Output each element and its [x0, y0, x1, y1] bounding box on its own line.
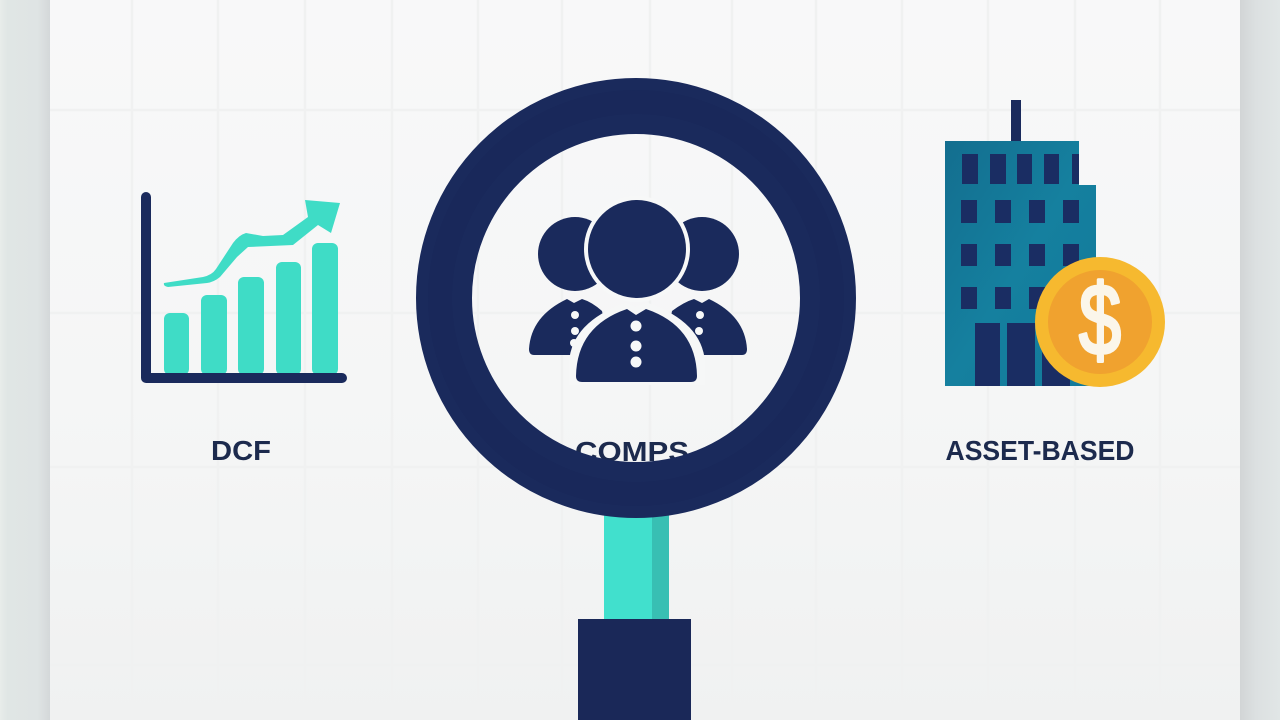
- chart axes: [146, 197, 342, 378]
- center peer: [569, 196, 705, 385]
- DCF growth chart icon: [146, 197, 342, 378]
- magnifying glass handle: [578, 510, 691, 720]
- antenna: [1011, 100, 1021, 141]
- peer buttons: [570, 311, 704, 347]
- growth arrow: [164, 200, 340, 287]
- dollar coin: [1035, 257, 1165, 387]
- COMPS label: COMPS: [575, 436, 689, 467]
- dollar coin: $: [1079, 264, 1121, 376]
- icon: office building with coin: [945, 100, 1165, 387]
- icon: peer group: [529, 196, 747, 385]
- DCF label: DCF: [211, 435, 271, 466]
- windows: [961, 154, 1079, 386]
- magnifying glass ring: [440, 102, 832, 494]
- left peer: [529, 217, 612, 355]
- chart bars: [164, 243, 338, 375]
- ASSET-BASED label: ASSET-BASED: [946, 435, 1134, 466]
- right peer: [665, 217, 747, 355]
- building body: [945, 141, 1096, 386]
